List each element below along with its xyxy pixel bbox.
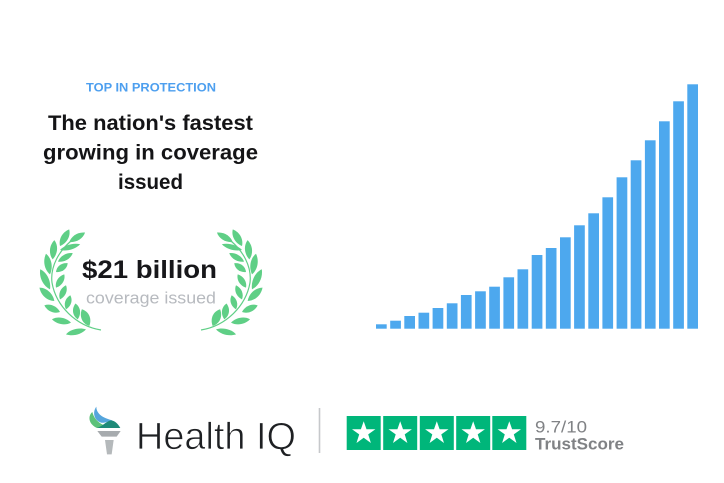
heading: The nation's fastest (48, 112, 253, 135)
heading: issued (118, 171, 183, 194)
icon: torch (89, 407, 121, 454)
logo: Health IQ (89, 407, 296, 458)
icon: left laurel (37, 228, 101, 337)
rating score: 9.7/10 (535, 418, 587, 436)
bar chart: coverage growth (376, 84, 698, 329)
heading: growing in coverage (43, 142, 258, 164)
rating: Trustpilot stars (347, 416, 526, 450)
stat: 21 billion: $21 billion (82, 256, 217, 284)
rating label: TrustScore (535, 434, 624, 454)
icon: right laurel (201, 228, 265, 337)
divider (319, 408, 320, 453)
stat label: coverage issued (86, 288, 216, 308)
award: laurel with coverage figure (37, 228, 265, 337)
heading (43, 112, 258, 194)
wordmark: Health IQ (136, 416, 296, 458)
eyebrow: top in protection: TOP IN PROTECTION (86, 80, 216, 94)
